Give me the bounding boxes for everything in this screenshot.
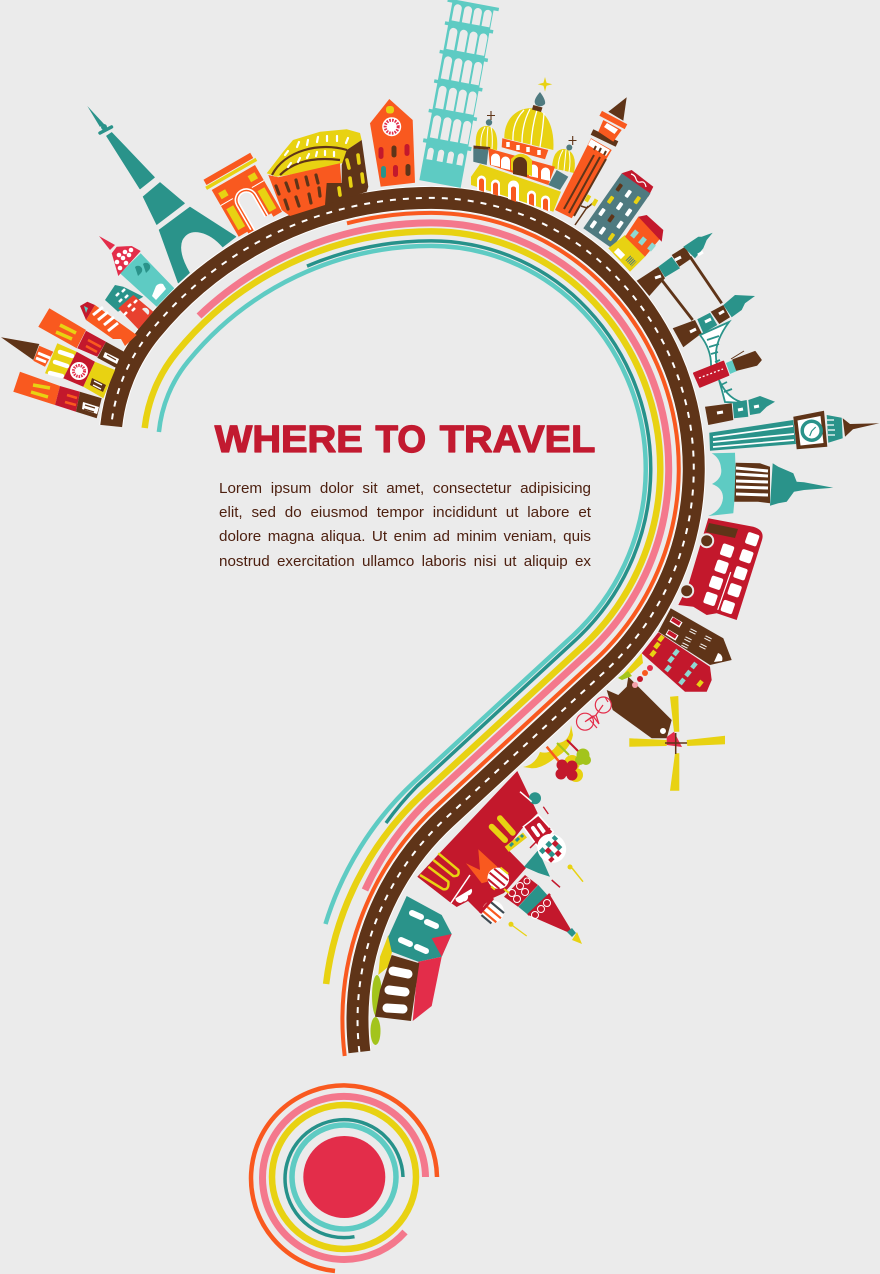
- title: TRAVEL: [440, 419, 595, 461]
- icon: red bicycle: [576, 697, 611, 730]
- title: TO: [376, 419, 426, 461]
- icon: corner house: [370, 896, 452, 1045]
- icon: teal and red houses: [105, 285, 153, 329]
- body text: [219, 480, 591, 570]
- icon: Big Ben: [709, 411, 879, 451]
- icon: St Basil's cathedral: [417, 771, 583, 944]
- title: [215, 419, 595, 461]
- icon: upper gothic row: [38, 308, 124, 368]
- icon: lower gothic row: [13, 372, 102, 418]
- icon: small orange house: [80, 302, 137, 346]
- icon: Dutch canal houses: [642, 608, 732, 692]
- icon: leaning tower of Pisa: [414, 0, 499, 189]
- icon: orange and yellow townhouse: [608, 215, 663, 272]
- icon: tower bridge: [637, 233, 775, 425]
- body text: nostrud exercitation ullamco laboris nisi ut aliquip ex: [219, 553, 591, 570]
- icon: trees: [523, 725, 591, 782]
- icon: slate townhouse: [583, 170, 653, 248]
- icon: street lamp: [575, 194, 598, 225]
- icon: tulips: [618, 653, 653, 688]
- icon: windmill: [607, 677, 725, 791]
- body text: elit, sed do eiusmod tempor incididunt ut labore et: [219, 504, 591, 521]
- icon: orange clock house: [370, 99, 415, 187]
- concentric dot of the question mark: [251, 1085, 437, 1271]
- icon: dome chapel: [99, 236, 174, 307]
- body text: Lorem ipsum dolor sit amet, consectetur adipisicing: [219, 480, 591, 497]
- question mark road: [111, 198, 694, 1052]
- icon: double-decker bus: [678, 518, 763, 620]
- icon: colosseum: [267, 129, 368, 216]
- icon: triumphal arch: [202, 152, 286, 240]
- title: WHERE: [215, 419, 363, 461]
- icon: bell tower: [555, 97, 627, 218]
- rainbow strips: [145, 213, 679, 1056]
- icon: middle gothic row with spire: [1, 337, 115, 398]
- body text: dolore magna aliqua. Ut enim ad minim veniam, quis: [219, 528, 591, 545]
- icon: St Paul's cathedral: [708, 453, 833, 516]
- icon: domed basilica: [471, 77, 576, 212]
- icon: Eiffel tower: [87, 106, 236, 283]
- icon: royal guard: [694, 351, 761, 387]
